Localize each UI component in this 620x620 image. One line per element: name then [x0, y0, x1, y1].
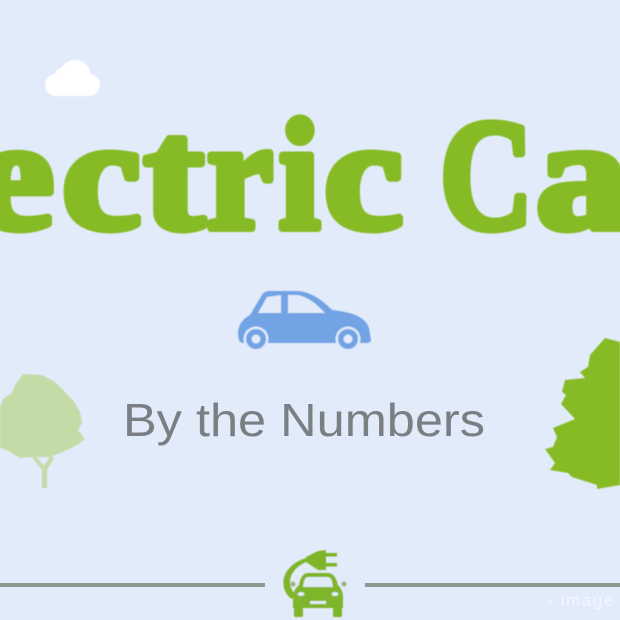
divider left: [0, 583, 265, 587]
title: c: [324, 88, 403, 263]
icon: charging car: [283, 550, 346, 617]
title: C: [440, 88, 533, 263]
divider right: [365, 583, 620, 587]
subtitle: By the Numbers: [123, 394, 485, 446]
title: r: [207, 88, 273, 263]
title: i: [279, 88, 320, 263]
title: [0, 88, 620, 263]
title: a: [536, 88, 620, 263]
icon: blue car: [238, 291, 371, 352]
icon: light green tree: [0, 374, 85, 488]
icon: cloud: [45, 60, 100, 96]
watermark: - image: [547, 591, 615, 610]
title: c: [62, 88, 141, 263]
icon: dark green tree: [545, 338, 620, 489]
title: t: [144, 88, 204, 263]
